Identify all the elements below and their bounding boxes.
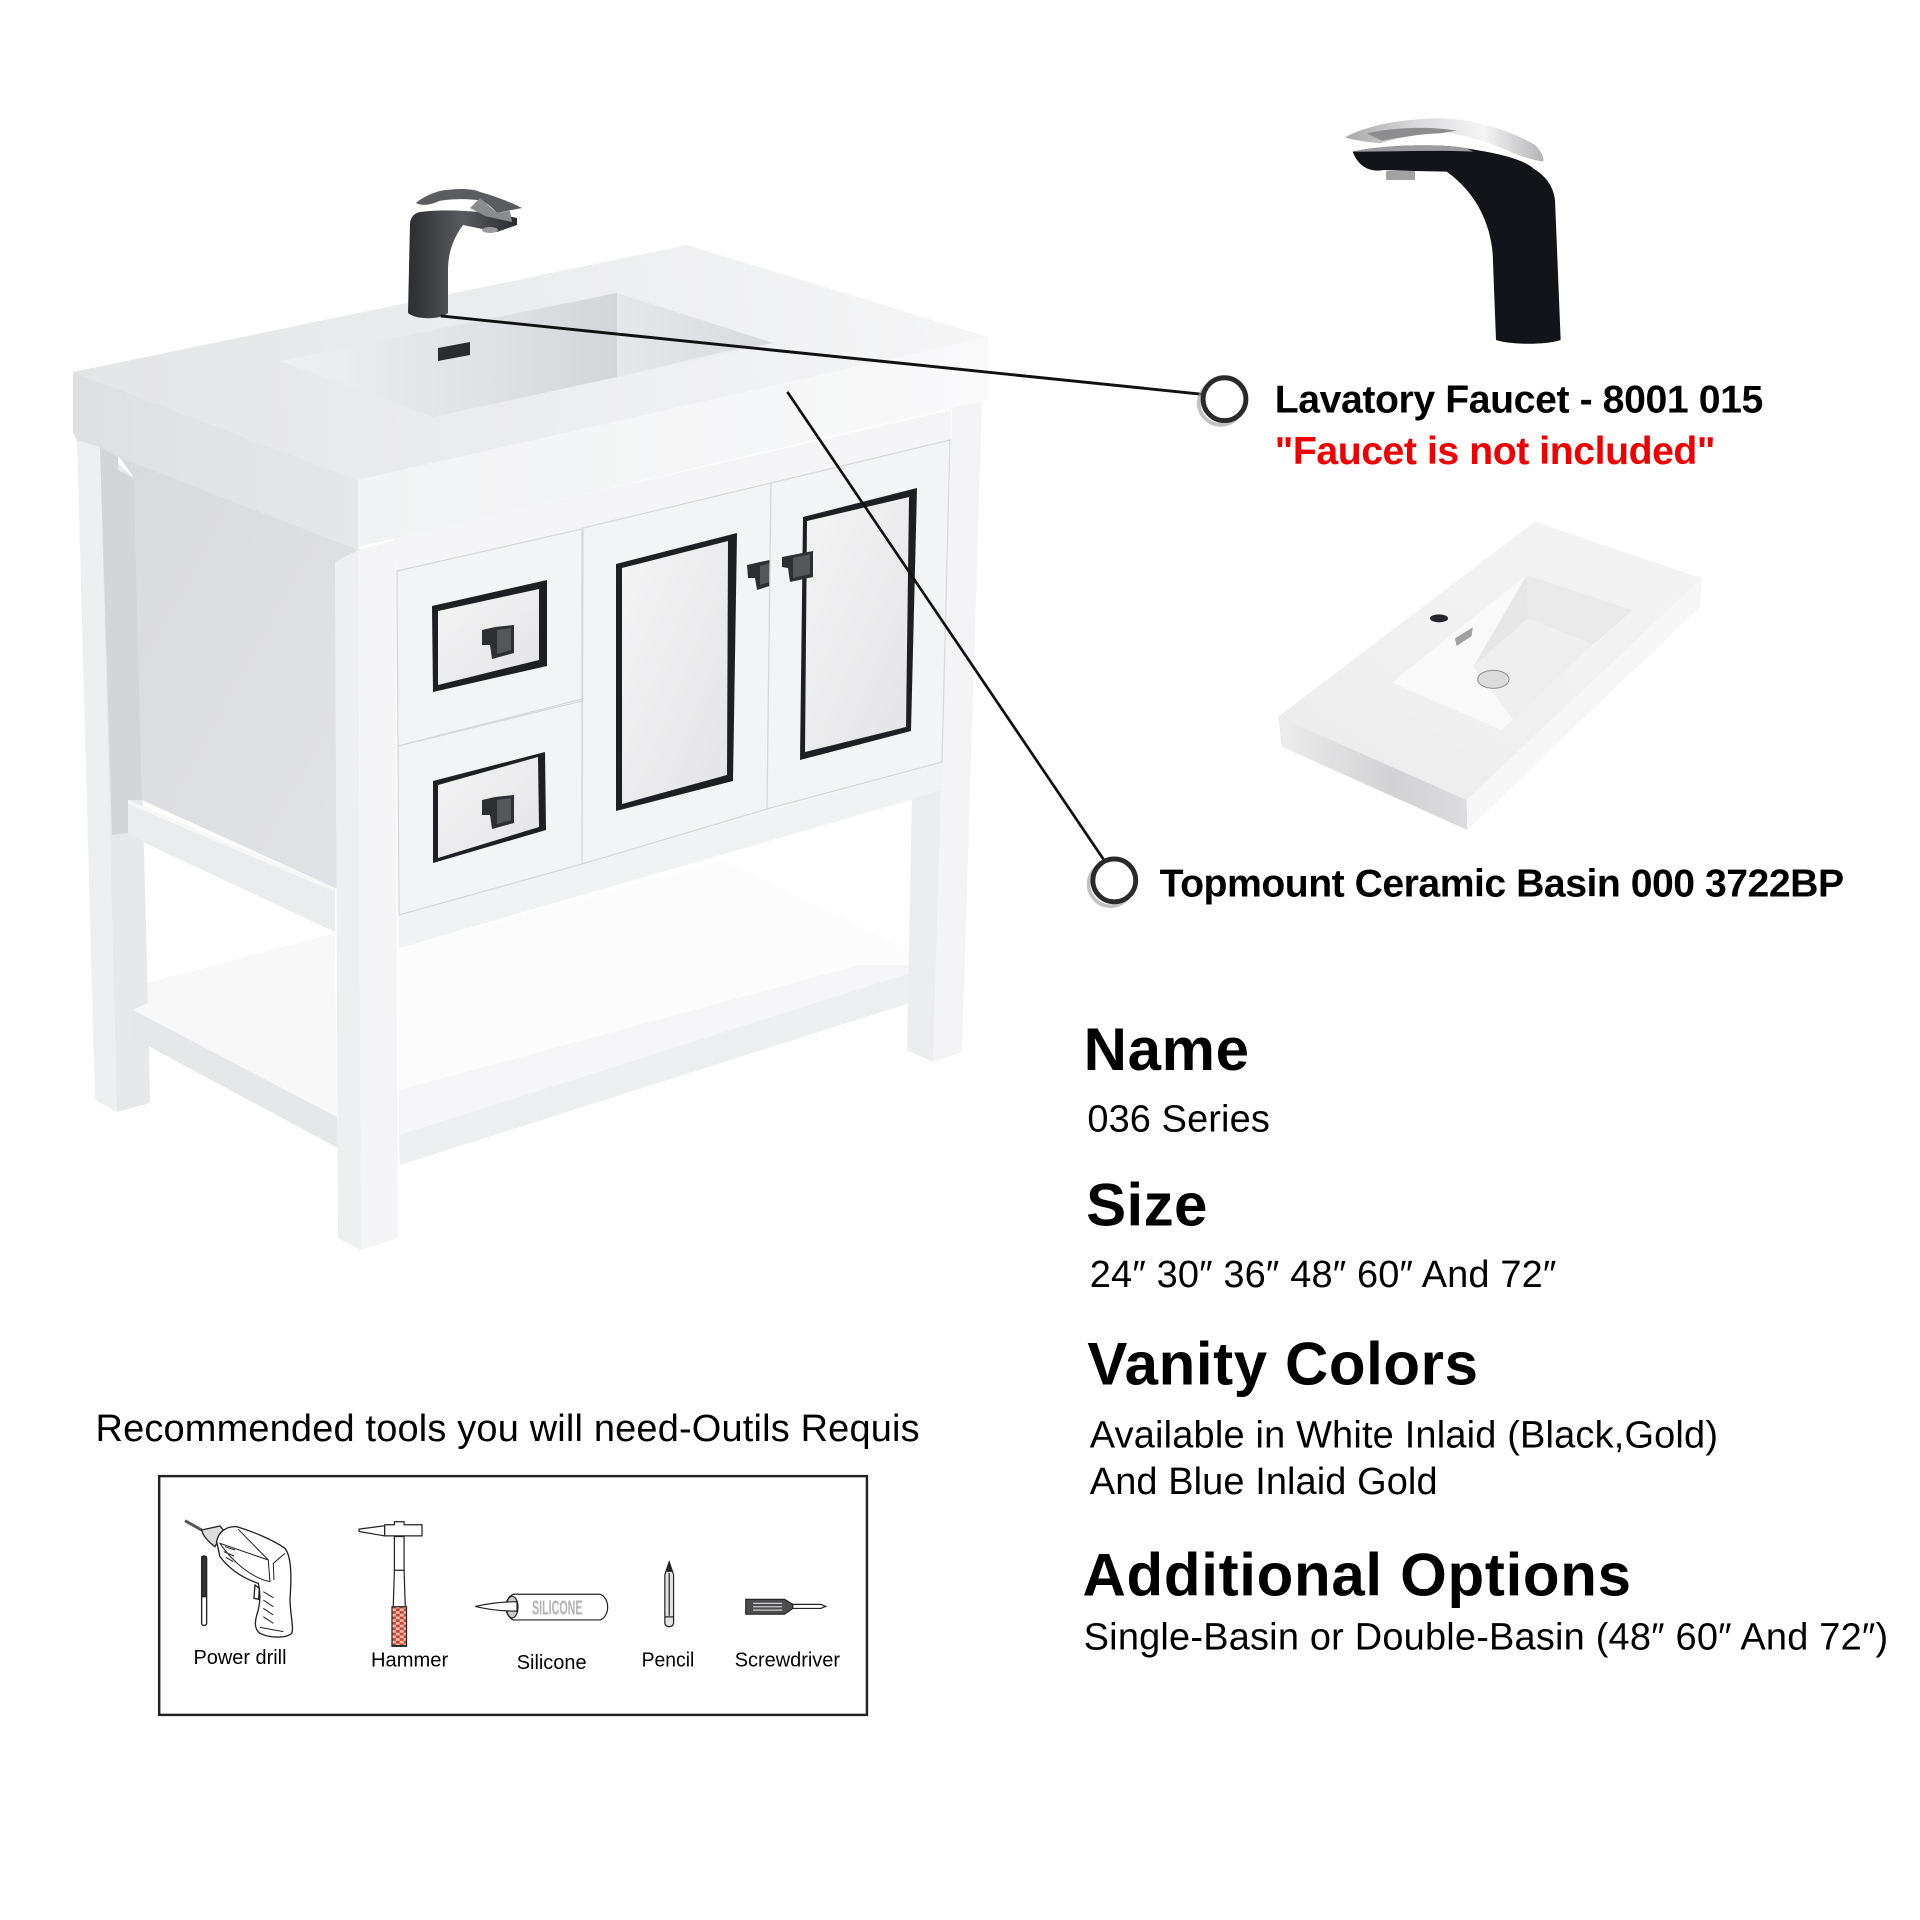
right door [767, 440, 950, 809]
drain [1478, 670, 1509, 688]
icon: screwdriver [746, 1599, 826, 1614]
name value: 036 Series [1087, 1098, 1270, 1140]
vanity colors value: Available in White Inlaid (Black,Gold) [1090, 1414, 1718, 1456]
front left leg [335, 540, 398, 1250]
sink basin [280, 293, 773, 417]
heading: size: Size [1086, 1172, 1207, 1239]
lower shelf right [399, 860, 935, 1165]
knob [482, 625, 514, 659]
right leg [907, 402, 982, 1062]
left back leg [77, 438, 150, 1112]
vanity cabinet illustration [73, 189, 988, 1250]
countertop [73, 245, 988, 550]
icon: pencil [665, 1562, 674, 1627]
panel: recommended tools [159, 1476, 867, 1715]
basin product image [1278, 522, 1702, 830]
icon: power drill [185, 1521, 292, 1637]
overflow [1455, 627, 1473, 646]
left side panel [118, 455, 362, 900]
heading: name: Name [1084, 1016, 1249, 1083]
bottom rail shading [399, 763, 942, 948]
overflow [438, 342, 470, 361]
heading: vanity colors: Vanity Colors [1087, 1330, 1478, 1397]
bottom drawer [398, 701, 582, 915]
callout line: faucet [441, 316, 1202, 394]
tool labels: Screwdriver [735, 1650, 840, 1672]
installed faucet [408, 189, 522, 318]
top drawer [397, 529, 582, 746]
vanity colors value [1090, 1414, 1718, 1503]
tool labels: Hammer [371, 1650, 448, 1672]
side stretcher [128, 800, 335, 932]
tool labels: Power drill [193, 1647, 287, 1669]
callout marker: basin [1089, 859, 1136, 906]
tap hole [1430, 614, 1448, 622]
additional options value: Single-Basin or Double-Basin (48″ 60″ And 72″) [1084, 1616, 1888, 1658]
label: basin: Topmount Ceramic Basin 000 3722BP [1160, 862, 1844, 905]
knob [482, 795, 514, 829]
handle [782, 551, 813, 582]
warning: faucet not included: "Faucet is not included" [1275, 430, 1716, 473]
cabinet front [395, 410, 951, 948]
label: faucet: Lavatory Faucet - 8001 015 [1275, 379, 1763, 422]
lower shelf left [133, 933, 338, 1148]
callout line: basin [787, 392, 1104, 861]
faucet product image [1345, 118, 1561, 344]
vanity colors value: And Blue Inlaid Gold [1090, 1461, 1438, 1503]
tool labels: Pencil [642, 1650, 694, 1672]
left door [582, 483, 779, 864]
tool labels [193, 1647, 840, 1674]
label: faucet [1275, 379, 1763, 473]
tool labels: Silicone [517, 1652, 587, 1674]
icon: silicone tube: SILICONE [532, 1597, 582, 1619]
heading: additional options: Additional Options [1082, 1542, 1631, 1609]
icon: silicone tube [475, 1594, 608, 1620]
handle [747, 558, 779, 590]
callout marker: faucet [1199, 378, 1246, 425]
size value: 24″ 30″ 36″ 48″ 60″ And 72″ [1090, 1254, 1556, 1296]
tools heading: Recommended tools you will need-Outils Requis [96, 1408, 920, 1450]
icon: hammer [359, 1522, 422, 1646]
